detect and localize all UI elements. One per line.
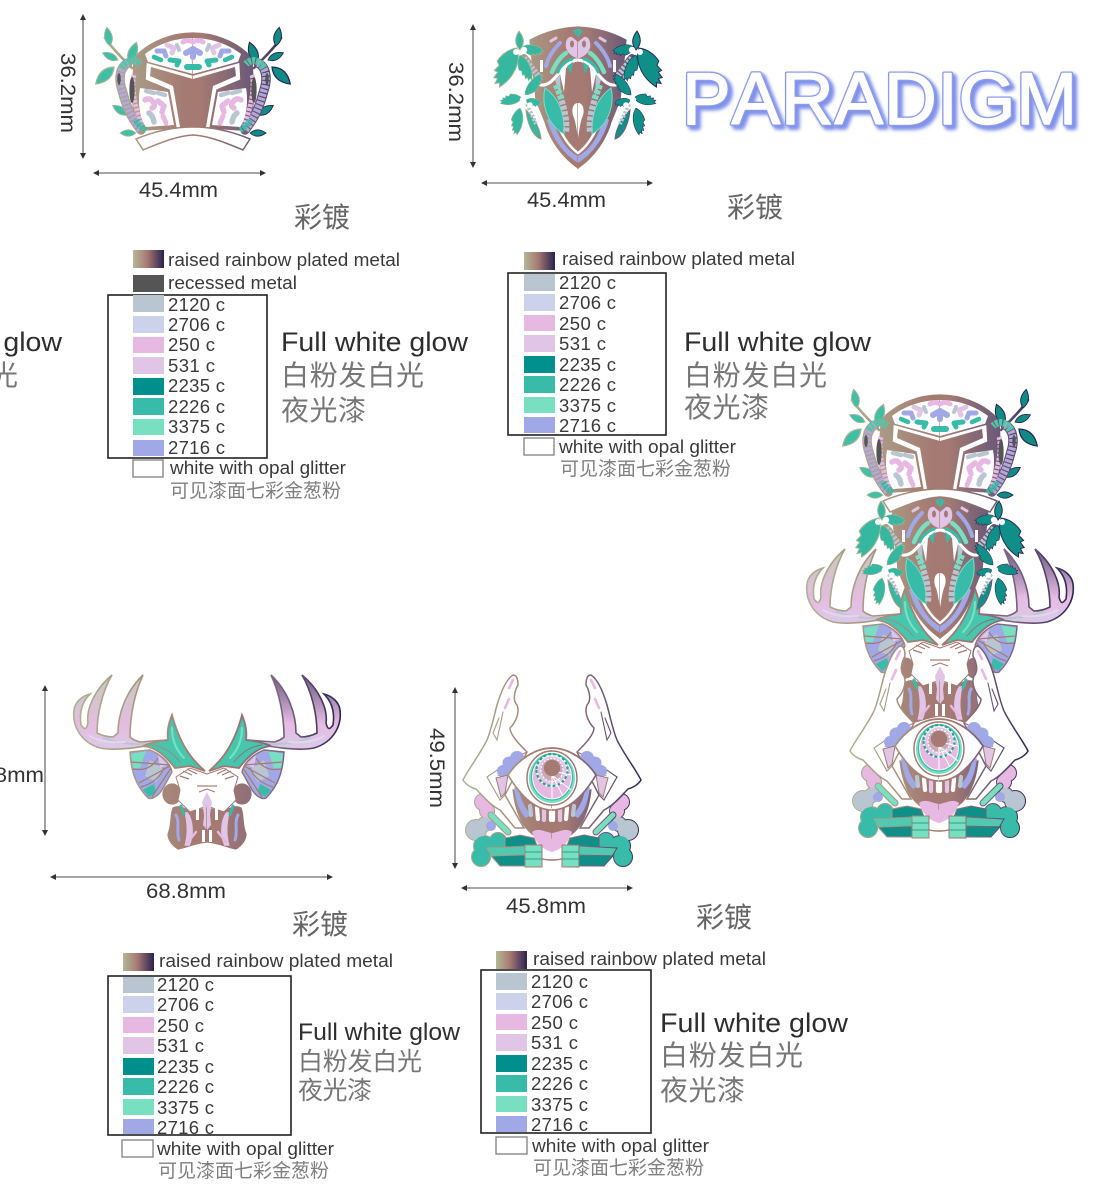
legend box and Pantone rows: 2226 c <box>531 1073 588 1094</box>
colour legend: pin 3 <box>108 950 393 1182</box>
swatch row: white with opal glitter: 可见漆面七彩金葱粉 <box>560 458 731 480</box>
swatch row: raised rainbow plated metal: raised rainbow plated metal <box>159 950 393 971</box>
glow note: pin 2: 白粉发白光 <box>684 360 827 391</box>
combined totem of all four pins <box>807 389 1073 838</box>
legend box and Pantone rows: 2235 c <box>559 354 616 375</box>
wordmark: PARADIGM: PARADIGM <box>682 59 1077 140</box>
glow note: pin 2: 夜光漆 <box>684 392 769 423</box>
legend box and Pantone rows: 250 c <box>157 1015 204 1036</box>
swatch row: raised rainbow plated metal: raised rainbow plated metal <box>562 248 795 269</box>
legend box and Pantone rows: 2706 c <box>531 991 588 1012</box>
legend box and Pantone rows: 2120 c <box>531 971 588 992</box>
glow note: pin 3 <box>298 1019 461 1105</box>
glow note: pin 3: 白粉发白光 <box>298 1048 422 1076</box>
legend box and Pantone rows: 2226 c <box>559 374 616 395</box>
legend box and Pantone rows: 2235 c <box>531 1053 588 1074</box>
legend box and Pantone rows: 2226 c <box>168 396 225 417</box>
swatch row: white with opal glitter: white with opal glitter <box>558 436 736 457</box>
legend box and Pantone rows: 2120 c <box>559 272 616 293</box>
colour legend: pin 1 <box>108 249 400 502</box>
legend box and Pantone rows: 250 c <box>559 313 606 334</box>
glow note: pin 4: 夜光漆 <box>660 1075 745 1106</box>
plating label: pin 1: 彩镀 <box>294 202 350 233</box>
colour legend: pin 4 <box>481 948 766 1179</box>
legend box and Pantone rows: 250 c <box>531 1012 578 1033</box>
legend box and Pantone rows: 3375 c <box>559 395 616 416</box>
legend box and Pantone rows: 531 c <box>157 1035 204 1056</box>
totem layer: helmet <box>839 389 1041 512</box>
dimension: pin 1 height: 36.2mm <box>56 53 79 133</box>
legend box and Pantone rows: 2706 c <box>168 314 225 335</box>
plating label: pin 2: 彩镀 <box>727 192 783 223</box>
totem layer: open mouth mask <box>849 497 1031 638</box>
wordmark: PARADIGM: PARADIGM <box>682 59 1077 140</box>
dimension: pin 1 height <box>56 14 86 159</box>
dimension: pin 1 width <box>93 170 266 202</box>
legend box and Pantone rows: 3375 c <box>531 1094 588 1115</box>
swatch row: white with opal glitter: 可见漆面七彩金葱粉 <box>158 1160 329 1182</box>
legend box and Pantone rows: 2235 c <box>157 1056 214 1077</box>
swatch row: white with opal glitter <box>496 1135 709 1179</box>
glow note: pin 2: Full white glow <box>684 327 872 357</box>
swatch row: white with opal glitter <box>133 457 346 502</box>
swatch row: white with opal glitter: white with opal glitter <box>531 1135 709 1156</box>
swatch row: white with opal glitter: 可见漆面七彩金葱粉 <box>533 1157 704 1179</box>
legend box and Pantone rows: 531 c <box>531 1032 578 1053</box>
pin 3: deer skull with antlers <box>74 675 340 849</box>
pin 4: eye, hands and tanks <box>463 675 641 867</box>
dimension: pin 4 height <box>425 687 458 869</box>
legend box and Pantone rows <box>108 294 267 458</box>
totem layer: eye and tanks <box>850 646 1028 838</box>
swatch row: white with opal glitter <box>122 1138 334 1182</box>
glow note: pin 4: Full white glow <box>660 1008 849 1038</box>
legend box and Pantone rows: 2706 c <box>157 994 214 1015</box>
dimension: pin 2 width <box>481 180 653 212</box>
plating label: pin 4: 彩镀 <box>696 902 752 933</box>
glow note: pin 1: 白粉发白光 <box>281 360 424 391</box>
legend box and Pantone rows <box>108 974 291 1138</box>
legend box and Pantone rows: 3375 c <box>168 416 225 437</box>
pin 2: open mouth mask with palm trees <box>487 27 669 168</box>
legend box and Pantone rows: 2120 c <box>157 974 214 995</box>
pin 1: helmet with palm leaves <box>92 27 294 150</box>
swatch row: recessed metal: recessed metal <box>168 272 297 293</box>
swatch row: white with opal glitter: white with opal glitter <box>169 457 346 478</box>
legend box and Pantone rows <box>481 970 651 1135</box>
glow note: clipped at the left edge <box>0 327 63 391</box>
swatch row: white with opal glitter: 可见漆面七彩金葱粉 <box>170 480 341 502</box>
legend box and Pantone rows <box>508 272 666 436</box>
legend box and Pantone rows: 3375 c <box>157 1097 214 1118</box>
legend box and Pantone rows: 2716 c <box>531 1114 588 1135</box>
swatch row: white with opal glitter <box>524 436 736 480</box>
dimension: pin 2 height <box>444 24 476 168</box>
plating label: pin 3: 彩镀 <box>292 909 348 940</box>
legend box and Pantone rows: 2716 c <box>157 1117 214 1138</box>
colour legend: pin 2 <box>508 248 795 480</box>
legend box and Pantone rows: 2226 c <box>157 1076 214 1097</box>
dimension: pin 3 width <box>50 874 333 903</box>
dimension: pin 4 width <box>461 885 633 918</box>
dimension: pin 3 width: 68.8mm <box>146 880 226 903</box>
glow note: pin 1: Full white glow <box>281 327 469 357</box>
glow note: pin 3: 夜光漆 <box>298 1077 372 1105</box>
glow note: pin 1: 夜光漆 <box>281 395 366 426</box>
swatch row: white with opal glitter: white with opal glitter <box>156 1138 334 1159</box>
dimension: pin 2 height: 36.2mm <box>444 62 467 142</box>
dimension: pin 4 height: 49.5mm <box>425 728 448 808</box>
glow note: pin 2 <box>684 327 872 423</box>
legend box and Pantone rows: 2716 c <box>168 437 225 458</box>
legend box and Pantone rows: 2235 c <box>168 375 225 396</box>
dimension: pin 4 width: 45.8mm <box>506 895 586 918</box>
dimension: pin 1 width: 45.4mm <box>139 179 218 202</box>
totem layer: deer skull <box>807 549 1073 723</box>
glow note: pin 4: 白粉发白光 <box>660 1040 803 1071</box>
swatch row: raised rainbow plated metal: raised rainbow plated metal <box>168 249 400 270</box>
glow note: pin 4 <box>660 1008 849 1106</box>
legend box and Pantone rows: 250 c <box>168 334 215 355</box>
swatch row: raised rainbow plated metal: raised rainbow plated metal <box>533 948 766 969</box>
glow note: pin 1 <box>281 327 469 426</box>
legend box and Pantone rows: 2120 c <box>168 294 225 315</box>
legend box and Pantone rows: 531 c <box>168 355 215 376</box>
dimension: pin 2 width: 45.4mm <box>527 189 606 212</box>
legend box and Pantone rows: 2706 c <box>559 292 616 313</box>
legend box and Pantone rows: 531 c <box>559 333 606 354</box>
legend box and Pantone rows: 2716 c <box>559 415 616 436</box>
dimension: pin 3 height <box>0 685 48 836</box>
glow note: pin 3: Full white glow <box>298 1019 461 1046</box>
